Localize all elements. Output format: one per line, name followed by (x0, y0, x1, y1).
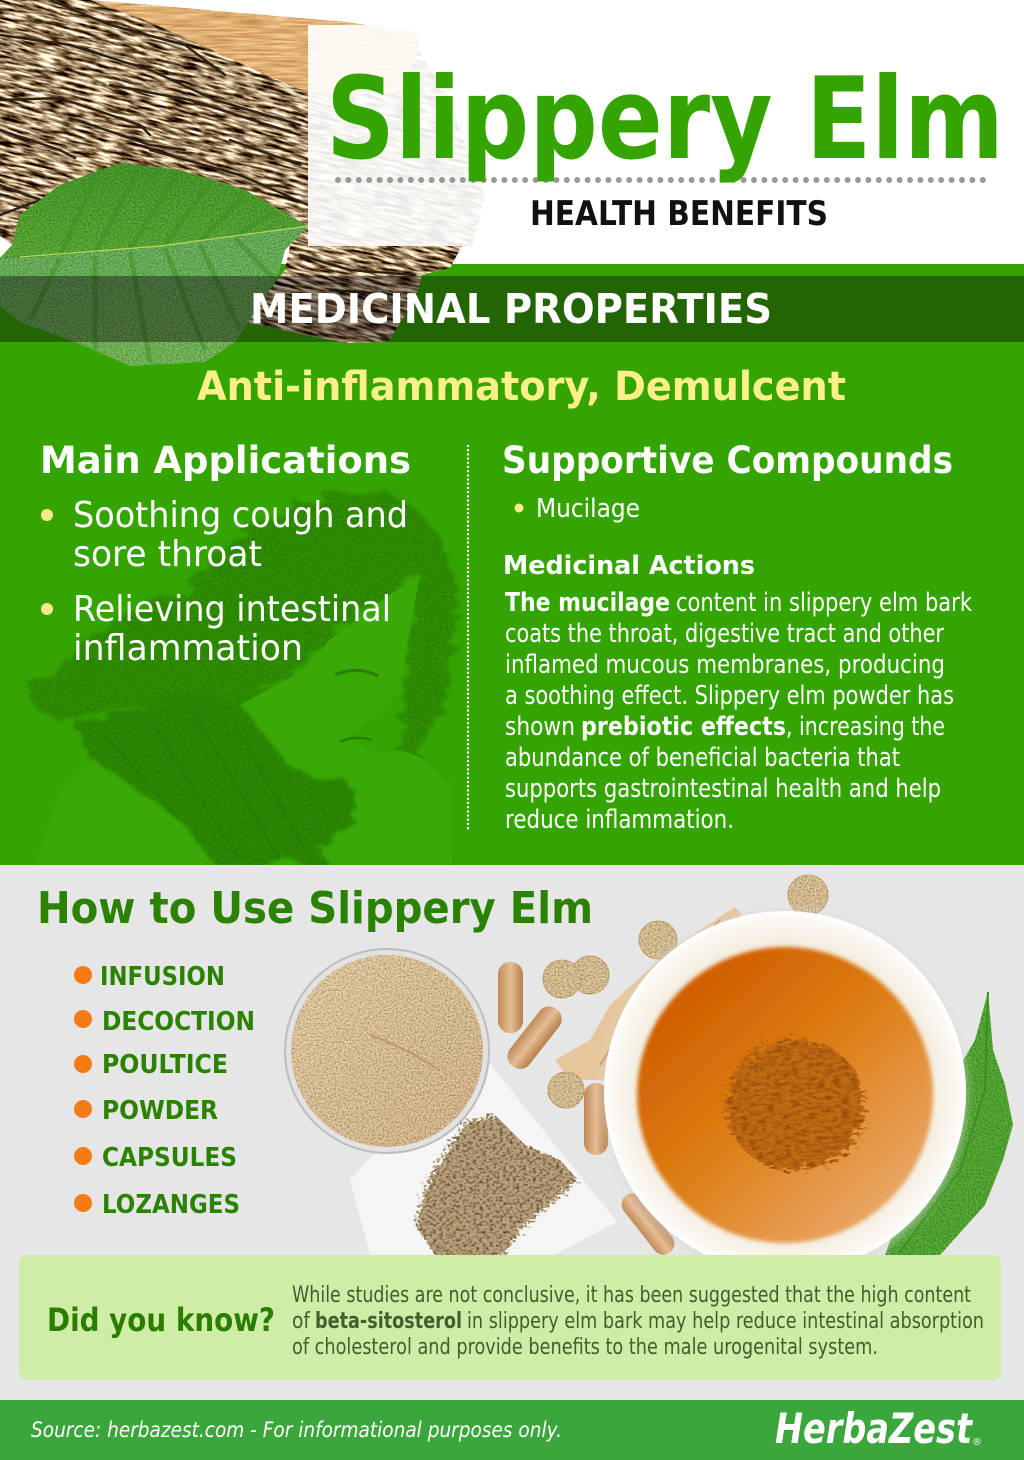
subheading: properties: Anti-inflammatory, Demulcent (197, 364, 846, 410)
text block: medicinal actions: supports gastrointestinal health and help (505, 774, 941, 804)
heading: medicinal properties: MEDICINAL PROPERTIES (250, 285, 772, 333)
heading: main applications: Main Applications (40, 439, 411, 482)
list: forms of use: DECOCTION (102, 1007, 255, 1037)
list: main applications: Soothing cough and (73, 495, 408, 536)
heading: medicinal actions: Medicinal Actions (503, 551, 755, 581)
image: shredded bark pile (415, 1115, 578, 1262)
list: compounds: Mucilage (536, 494, 640, 524)
text block: medicinal actions: , increasing the (786, 712, 945, 742)
list: forms of use: POWDER (102, 1096, 218, 1126)
panel: medicinal properties green background (0, 264, 1024, 865)
list: forms of use (74, 962, 255, 1220)
list: main applications: sore throat (73, 534, 262, 575)
icon: capsule 3 (584, 1083, 608, 1155)
icon: capsule 2 (507, 1006, 562, 1069)
image: powder dish (285, 949, 489, 1153)
list: forms of use: CAPSULES (102, 1143, 237, 1173)
heading: supportive compounds: Supportive Compounds (502, 439, 953, 482)
callout: did you know: of (292, 1308, 311, 1334)
logo: HerbaZest: HerbaZest (775, 1404, 974, 1453)
footer source: Source: herbazest.com - For informational purposes only. (31, 1418, 562, 1442)
text block: medicinal actions: shown (505, 712, 575, 742)
image: woman coughing (28, 490, 457, 865)
image: elm leaf (0, 163, 308, 366)
panel: how to use background (0, 865, 1024, 1400)
image: tea bowl (603, 910, 967, 1278)
list: main applications: inflammation (73, 628, 303, 669)
list: forms of use: POULTICE (102, 1050, 228, 1080)
callout: did you know: of cholesterol and provide benefits to the male urogenital system. (292, 1334, 878, 1360)
dark band: medicinal properties (0, 276, 1024, 342)
white title panel (308, 25, 1024, 246)
callout: did you know (19, 1255, 1001, 1380)
icon: capsule 4 (622, 1193, 674, 1255)
heading: how to use: How to Use Slippery Elm (37, 883, 593, 934)
icon: tablets (543, 875, 828, 1108)
text block: medicinal actions (505, 588, 972, 835)
list: main applications: Relieving intestinal (73, 589, 391, 630)
text block: medicinal actions: prebiotic effects (581, 712, 786, 742)
icon: elm leaf behind bowl (885, 992, 1013, 1255)
list: forms of use: LOZANGES (102, 1190, 240, 1220)
image: slippery elm products (285, 875, 1013, 1278)
subtitle: HEALTH BENEFITS (530, 194, 828, 234)
logo: HerbaZest: ® (972, 1437, 982, 1448)
image: white napkin (350, 1064, 617, 1262)
callout: did you know: Did you know? (47, 1301, 275, 1339)
dotted column divider (467, 446, 469, 830)
text block: medicinal actions: abundance of beneficial bacteria that (505, 743, 900, 773)
list: forms of use: INFUSION (100, 962, 225, 992)
text block: medicinal actions: reduce inflammation. (505, 805, 734, 835)
image: bark sticks (555, 907, 742, 1080)
icon: capsule 1 (498, 962, 523, 1033)
list: main applications (41, 495, 408, 669)
dotted divider under title (338, 177, 992, 183)
callout: did you know: beta-sitosterol (315, 1308, 462, 1334)
footer bar (0, 1400, 1024, 1460)
text block: medicinal actions: The mucilage (505, 588, 670, 618)
image: slippery elm bark (0, 0, 485, 343)
text block: medicinal actions: inflamed mucous membranes, producing (505, 650, 945, 680)
